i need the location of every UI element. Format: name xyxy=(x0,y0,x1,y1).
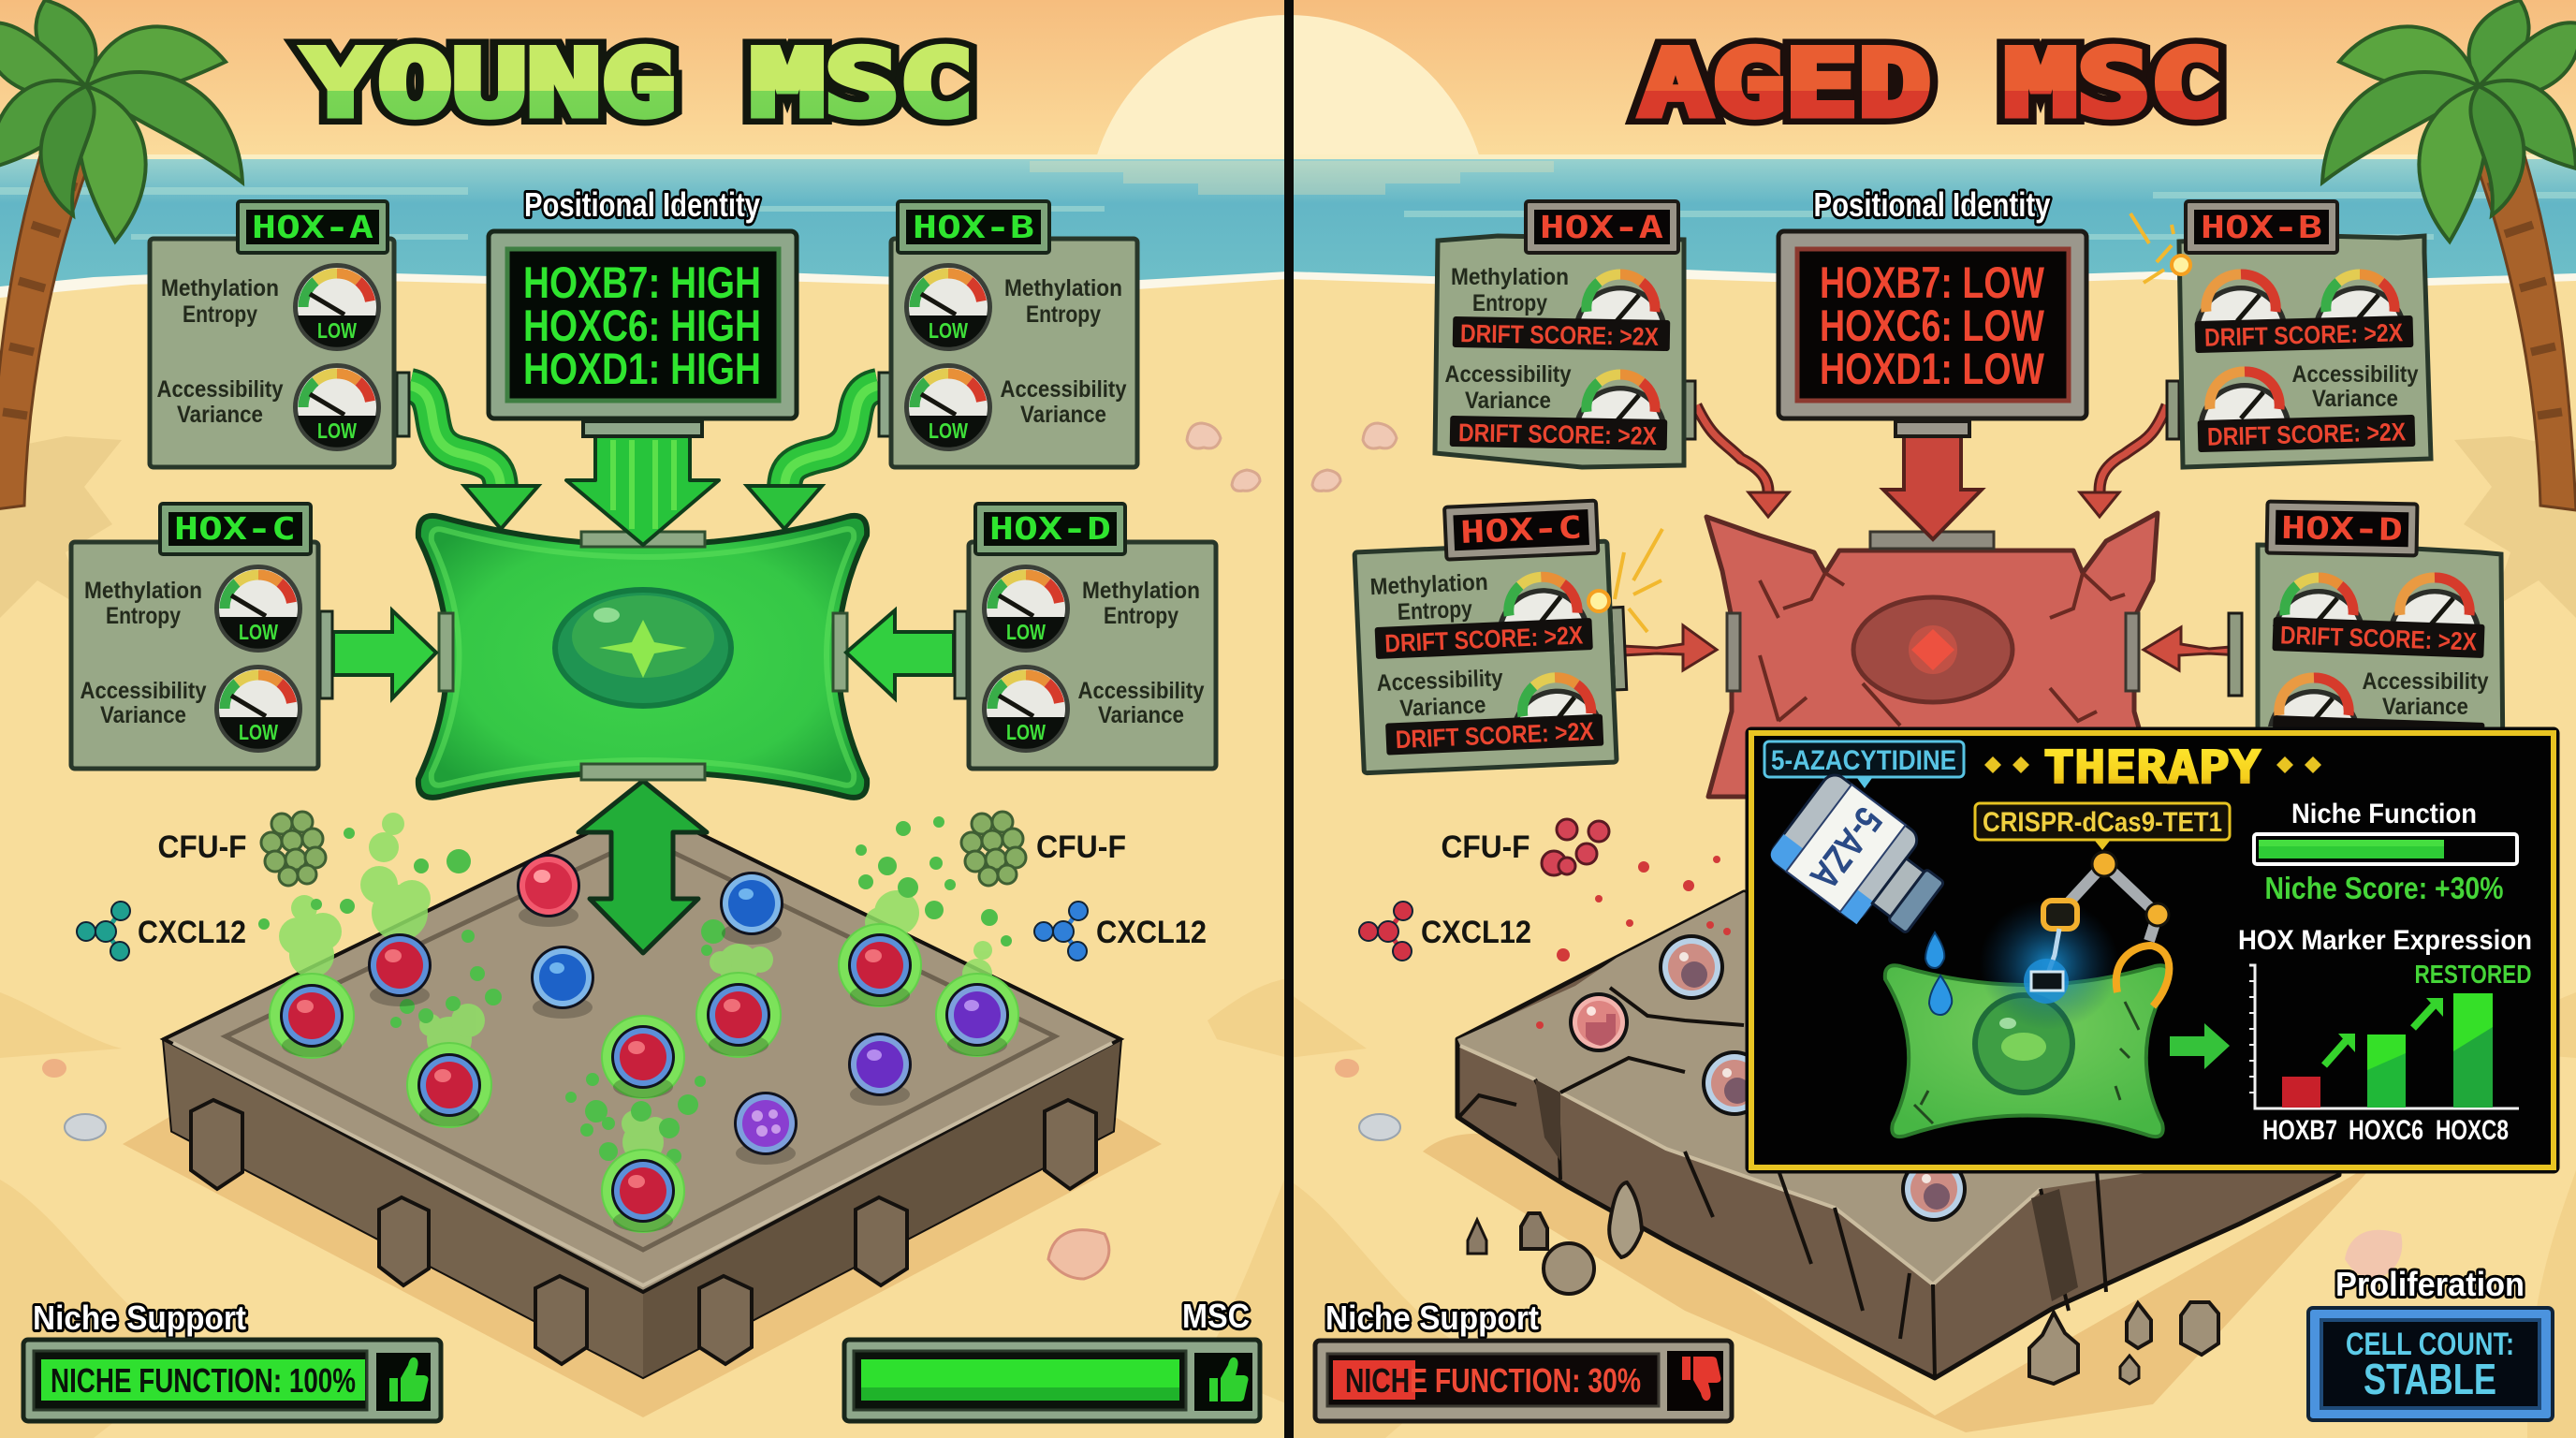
label: aged CFU-F: CFU-F xyxy=(1442,829,1530,865)
bar chart: HOX marker expression: HOXC6 xyxy=(2349,1115,2423,1146)
panel: young HOX-D: LOW xyxy=(1006,720,1046,744)
arrow: positional identity to cell xyxy=(566,436,719,545)
panel: young HOX-B: Accessibility xyxy=(1000,376,1127,403)
panel: young HOX-C: LOW xyxy=(239,720,278,744)
panel: young positional identity monitor: HOXB7: HIGH xyxy=(523,257,761,307)
panel: aged HOX-B: HOX-B xyxy=(2201,209,2322,245)
panel: aged HOX-A: Variance xyxy=(1465,388,1551,414)
icon: young MSC cells xyxy=(280,854,1009,1232)
label: 5-azacytidine: 5-AZACYTIDINE xyxy=(1771,745,1956,776)
panel: young HOX-D: Accessibility xyxy=(1078,678,1205,704)
icon: shells and pebbles xyxy=(42,423,2402,1279)
panel: aged HOX-C: Accessibility xyxy=(1376,665,1503,697)
label: aged CFU-F xyxy=(1442,819,1609,875)
icon: 5-AZA vial: 5-AZA xyxy=(1802,800,1891,898)
panel: young HOX-D: Methylation xyxy=(1082,578,1200,604)
bar: young niche function xyxy=(23,1340,441,1421)
arrow: HOX-A to cell xyxy=(410,386,538,529)
panel: aged positional identity monitor: HOXD1: LOW xyxy=(1820,344,2044,393)
panel: young HOX-B: Variance xyxy=(1020,402,1106,428)
panel: aged HOX-D: Variance xyxy=(2382,694,2468,720)
label: niche function: Niche Function xyxy=(2291,799,2477,829)
panel: young cell xyxy=(418,516,867,798)
icon: aged scattered particles xyxy=(1536,856,1731,1029)
panel: young HOX-A: HOX-A xyxy=(252,209,373,245)
heading: HOX marker expression: HOX Marker Expression xyxy=(2238,925,2532,956)
panel: young HOX-C xyxy=(71,504,332,769)
label: restored: RESTORED xyxy=(2415,960,2531,989)
panel: cell count: STABLE xyxy=(2364,1355,2496,1403)
heading: therapy xyxy=(1984,741,2321,794)
icon: drops xyxy=(1925,932,1952,1015)
label: aged CXCL12 xyxy=(1359,902,1531,961)
panel: aged niche platform xyxy=(1423,892,2378,1432)
panel: young MSC glow and particles xyxy=(258,813,1018,1232)
arrow: HOX-A to aged cell xyxy=(1696,405,1789,517)
panel: young HOX-B: LOW xyxy=(929,418,968,443)
panel: young HOX-A: Accessibility xyxy=(157,376,284,403)
divider xyxy=(1284,0,1294,1438)
arrow: HOX-C to cell xyxy=(333,610,436,698)
label: young CXCL12 right: CXCL12 xyxy=(1096,915,1207,950)
heading: young MSC: YOUNG MSC xyxy=(303,31,973,138)
bar chart: HOX marker expression: HOXB7 xyxy=(2262,1115,2337,1146)
arrow: therapy result xyxy=(2170,1023,2230,1069)
panel: aged HOX-C: Entropy xyxy=(1397,596,1473,625)
panel: young HOX-A: LOW xyxy=(317,418,357,443)
panel: aged HOX-D: DRIFT SCORE: >2X xyxy=(2280,621,2477,656)
icon: robot arm dCas9 xyxy=(1979,852,2169,1030)
panel: aged HOX-A: Accessibility xyxy=(1445,361,1572,388)
panel: aged positional identity monitor xyxy=(1778,231,2086,436)
icon: left palm tree xyxy=(0,0,242,510)
panel: aged HOX-A: DRIFT SCORE: >2X xyxy=(1460,319,1659,351)
panel: young HOX-D: HOX-D xyxy=(989,510,1111,547)
panel: aged HOX-C: Methylation xyxy=(1369,569,1488,600)
arrow: HOX-C to aged cell xyxy=(1622,625,1717,670)
panel: cell count xyxy=(2308,1308,2553,1420)
panel: young HOX-A: LOW xyxy=(317,318,357,343)
panel: aged HOX-A: Entropy xyxy=(1472,290,1547,316)
panel: aged HOX-C: Variance xyxy=(1399,692,1486,722)
heading: young MSC: YOUNG MSC xyxy=(303,31,973,138)
panel: aged arrows xyxy=(1622,405,2241,670)
panel: aged HOX-B: DRIFT SCORE: >2X xyxy=(2207,418,2406,451)
panel: young HOX-C: Methylation xyxy=(84,578,202,604)
label: young niche support: Niche Support xyxy=(33,1299,246,1337)
arrow: HOX-B to cell xyxy=(747,386,878,529)
label: CRISPR: CRISPR-dCas9-TET1 xyxy=(1983,807,2222,838)
bar: therapy niche function xyxy=(2254,834,2517,864)
panel: aged HOX-B xyxy=(2167,201,2431,467)
heading: aged MSC: AGED MSC xyxy=(1639,31,2223,138)
panel: young HOX-A: Methylation xyxy=(161,275,279,301)
bar: aged niche function: NICHE FUNCTION: 30% xyxy=(1345,1361,1641,1400)
panel: aged HOX-A: HOX-A xyxy=(1540,209,1663,245)
bar chart: HOX marker expression xyxy=(2249,965,2519,1146)
panel: aged HOX-C: DRIFT SCORE: >2X xyxy=(1384,621,1584,658)
panel: aged HOX-B: DRIFT SCORE: >2X xyxy=(2204,318,2403,352)
label: young CXCL12 left: CXCL12 xyxy=(138,915,246,950)
panel: therapy xyxy=(1747,728,2558,1172)
heading: positional identity young: Positional Identity xyxy=(524,185,760,224)
panel: young HOX-C: HOX-C xyxy=(174,510,296,547)
label: CRISPR xyxy=(1975,803,2230,850)
panel: aged HOX-D: Accessibility xyxy=(2363,668,2489,695)
panel: aged HOX-A xyxy=(1435,201,1695,467)
panel: aged HOX-B: Variance xyxy=(2312,386,2398,412)
panel: aged positional identity monitor: HOXC6: LOW xyxy=(1820,301,2044,350)
heading: therapy: THERAPY xyxy=(2043,741,2261,794)
label: aged niche support: Niche Support xyxy=(1325,1299,1539,1337)
panel: young HOX-A: Entropy xyxy=(183,301,257,328)
icon: green repaired cell xyxy=(1885,965,2170,1137)
panel: young HOX-C: Accessibility xyxy=(80,678,207,704)
arrow: positional identity to aged cell xyxy=(1883,436,1982,539)
bar: young MSC xyxy=(844,1340,1260,1421)
panel: aged HOX-D xyxy=(2229,502,2503,768)
panel: aged HOX-A: DRIFT SCORE: >2X xyxy=(1458,418,1657,450)
panel: young HOX-B: Methylation xyxy=(1004,275,1122,301)
panel: young positional identity monitor: HOXD1: HIGH xyxy=(523,344,761,393)
label: young CFU-F right: CFU-F xyxy=(1036,829,1126,865)
panel: young HOX-B xyxy=(879,201,1137,467)
bar: aged niche function xyxy=(1315,1341,1732,1421)
panel: young HOX-C: Entropy xyxy=(106,603,181,629)
label: young MSC: MSC xyxy=(1182,1297,1250,1335)
text: niche score: Niche Score: +30% xyxy=(2265,871,2503,905)
label: young CFU-F right xyxy=(961,812,1126,886)
panel: young HOX-A xyxy=(150,201,409,467)
panel: young HOX-B: LOW xyxy=(929,318,968,343)
label: young CXCL12 left xyxy=(77,902,246,961)
label: 5-azacytidine xyxy=(1764,741,1964,788)
panel: aged HOX-C: HOX-C xyxy=(1459,508,1583,550)
panel: young HOX-D xyxy=(955,504,1216,769)
panel: aged HOX-C: DRIFT SCORE: >2X xyxy=(1395,717,1594,754)
panel: young HOX-A: Variance xyxy=(177,402,263,428)
arrow: young bidirectional cell to niche xyxy=(578,781,707,953)
arrow: HOX-B to aged cell xyxy=(2080,405,2167,517)
panel: aged HOX-A: Methylation xyxy=(1451,264,1569,290)
label: young CFU-F left: CFU-F xyxy=(157,829,247,865)
arrow: HOX-D to aged cell xyxy=(2144,627,2241,670)
panel: young HOX-D: Entropy xyxy=(1104,603,1178,629)
panel: young HOX-B: HOX-B xyxy=(913,209,1034,245)
panel: aged HOX-D: HOX-D xyxy=(2281,509,2403,548)
panel: aged cell xyxy=(1706,513,2159,797)
label: young CXCL12 right xyxy=(1034,902,1207,961)
panel: young HOX-C: LOW xyxy=(239,620,278,644)
heading: positional identity aged: Positional Identity xyxy=(1814,185,2050,224)
bar: young niche function: NICHE FUNCTION: 100% xyxy=(51,1361,356,1400)
label: aged CXCL12: CXCL12 xyxy=(1421,915,1531,950)
heading: aged MSC: AGED MSC xyxy=(1639,31,2223,138)
bar chart: HOX marker expression: HOXC8 xyxy=(2436,1115,2509,1146)
panel: young HOX-B: Entropy xyxy=(1026,301,1101,328)
panel: cell count: CELL COUNT: xyxy=(2346,1327,2514,1362)
panel: aged HOX-C xyxy=(1353,500,1630,773)
panel: young positional identity monitor xyxy=(489,231,797,436)
icon: right palm tree xyxy=(2322,0,2576,510)
panel: young positional identity monitor: HOXC6: HIGH xyxy=(523,301,761,350)
label: proliferation: Proliferation xyxy=(2335,1265,2525,1303)
icon: 5-AZA vial xyxy=(1767,770,1958,951)
panel: young connectors and arrows xyxy=(333,386,954,698)
panel: young HOX-D: Variance xyxy=(1098,702,1184,728)
icon: sparks xyxy=(1588,213,2190,632)
panel: young HOX-C: Variance xyxy=(100,702,186,728)
panel: aged HOX-B: Accessibility xyxy=(2291,361,2419,388)
panel: aged positional identity monitor: HOXB7: LOW xyxy=(1820,257,2044,307)
label: young CFU-F left xyxy=(157,812,326,886)
panel: young HOX-D: LOW xyxy=(1006,620,1046,644)
panel: young niche platform xyxy=(123,806,1162,1417)
arrow: HOX-D to cell xyxy=(846,610,954,698)
